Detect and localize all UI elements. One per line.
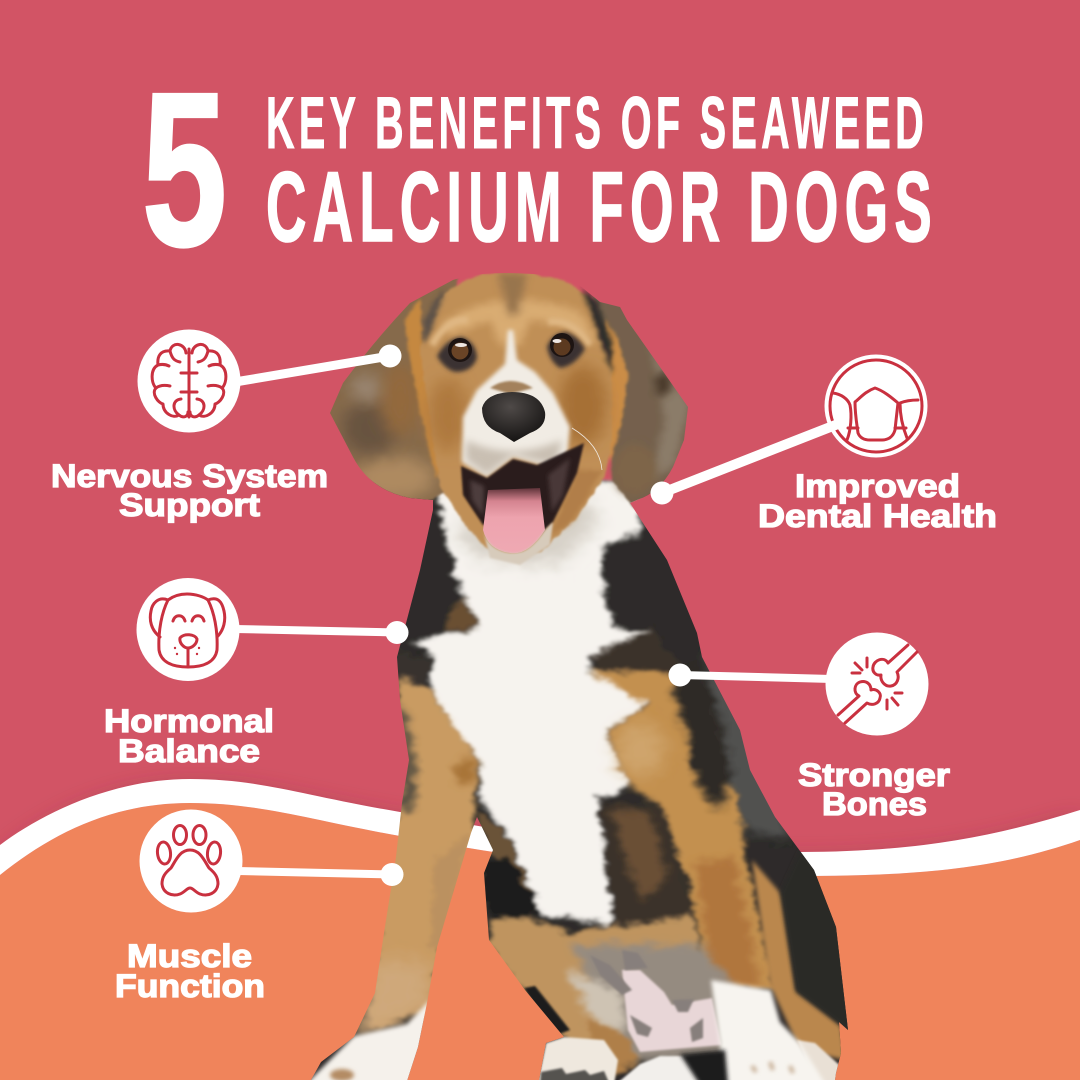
forehead dark stripe <box>498 272 527 315</box>
left leg lighter lower part <box>354 960 430 1040</box>
label: Function <box>115 968 265 1004</box>
dog photo illustration <box>311 273 848 1080</box>
right shoulder dark streak <box>672 665 730 810</box>
right brow <box>548 321 590 345</box>
icon: tooth <box>830 360 922 452</box>
connector line <box>235 356 390 382</box>
hind right tan <box>752 860 845 1060</box>
left iris <box>452 342 468 360</box>
connector dot <box>668 664 692 686</box>
connector line <box>235 629 397 632</box>
label <box>798 757 950 822</box>
left elbow brown <box>455 758 477 786</box>
label: Bones <box>822 786 927 822</box>
whisker <box>572 428 602 470</box>
left ear warm lower <box>355 456 435 500</box>
belly grey patches <box>590 950 703 1042</box>
tan near paw <box>585 1020 638 1075</box>
callout: stronger bones <box>668 632 950 822</box>
connector line <box>238 871 392 874</box>
head base <box>420 272 612 556</box>
left leg darker inner fold <box>430 835 470 950</box>
chest bib below chin <box>483 522 553 565</box>
forehead light tan <box>440 300 600 345</box>
right leg orange brown <box>695 860 760 985</box>
right eye socket <box>547 332 585 368</box>
tail black <box>680 1050 728 1080</box>
left cheek tan <box>428 379 468 451</box>
label: Dental Health <box>758 498 997 534</box>
belly light lower thigh <box>568 970 625 1035</box>
left ear base <box>310 270 460 510</box>
left inner chest streak <box>477 813 530 892</box>
icon circle <box>140 810 242 912</box>
hip black blob <box>484 860 540 920</box>
left shoulder and front leg <box>370 678 478 1030</box>
tail white tip <box>615 1056 705 1080</box>
muzzle grey shade <box>466 440 562 475</box>
left leg black streak <box>395 705 416 810</box>
grey outer back <box>703 650 790 840</box>
nose <box>482 392 545 442</box>
belly grey <box>571 945 735 1060</box>
right ear base <box>590 285 700 510</box>
title numeral 5: 5 <box>142 48 227 292</box>
right white leg and paw <box>711 980 826 1080</box>
white blaze <box>462 330 570 477</box>
right iris <box>554 338 570 356</box>
brown patch at left chest <box>445 600 480 632</box>
right shoulder light tan curl <box>616 724 664 776</box>
belly pink skin <box>622 970 722 1052</box>
left dark shoulder edge <box>397 656 428 684</box>
label: Stronger <box>798 757 950 793</box>
callout: muscle function <box>115 810 404 1004</box>
mouth gums left <box>470 480 484 516</box>
head group <box>310 270 700 556</box>
right eye highlight <box>552 339 562 343</box>
label: Muscle <box>127 938 252 974</box>
shoulder fold black with brown <box>592 628 678 672</box>
rear right paw <box>796 1039 838 1080</box>
paw toe tan dots <box>752 1062 793 1073</box>
hind left black sliver <box>524 986 570 1037</box>
muzzle tan spot <box>490 381 533 394</box>
wave shadow <box>62 777 1067 852</box>
tongue <box>483 488 545 553</box>
icon circle <box>138 330 240 432</box>
right cheek tan <box>559 365 607 445</box>
right ear dark spot <box>654 372 672 396</box>
orange lower panel <box>0 803 1080 1080</box>
left white paw <box>300 1000 430 1080</box>
icon circle <box>136 578 240 681</box>
connector dot <box>386 621 408 644</box>
icon circle <box>826 632 928 736</box>
connector line <box>680 675 832 679</box>
right ear warm lower <box>613 444 657 496</box>
connector dot <box>378 344 402 368</box>
right eye <box>550 333 574 357</box>
left ear orange inner edge <box>405 298 445 478</box>
right ear lighter edge <box>650 340 690 480</box>
jaw right tan <box>550 470 603 535</box>
grey neck shade <box>455 500 600 565</box>
label <box>51 458 328 523</box>
body group with fur edges <box>311 478 848 1080</box>
left ear dark centre <box>342 402 398 454</box>
white neck and chest <box>413 480 650 925</box>
connector line <box>662 424 838 493</box>
hind right black flank <box>777 850 848 1030</box>
dark edge right of head <box>582 288 612 375</box>
left eye highlight <box>455 343 467 347</box>
callout: improved dental health <box>650 354 997 534</box>
chest dark patch <box>598 802 697 925</box>
connector dot <box>380 863 404 886</box>
label: Hormonal <box>104 703 274 739</box>
label: Nervous System <box>51 458 328 494</box>
white wave band <box>0 779 1080 876</box>
left ear warm centre <box>380 364 420 436</box>
label <box>758 468 997 534</box>
icon: dog face <box>150 594 225 667</box>
title <box>142 48 938 292</box>
right shoulder tan <box>590 672 775 990</box>
body base black <box>311 478 848 1080</box>
mouth interior <box>461 443 584 535</box>
label: Balance <box>118 733 260 769</box>
callout: hormonal balance <box>104 578 408 769</box>
hind left thigh <box>488 917 700 1060</box>
callout: nervous system support <box>51 330 402 523</box>
connector dot <box>650 482 674 504</box>
label <box>115 938 265 1004</box>
left brow <box>432 320 468 345</box>
icon: brain <box>152 344 226 417</box>
front middle paw <box>537 1037 618 1080</box>
chest patch tan streaks <box>610 808 668 900</box>
icon: paw <box>156 826 222 895</box>
left paw tan smudge <box>330 1069 354 1080</box>
left eye socket <box>437 337 477 372</box>
label: Improved <box>795 468 960 504</box>
dark edge left of head <box>423 290 445 345</box>
paw toenails dark <box>540 1068 610 1080</box>
icon circle <box>824 354 928 458</box>
right ear orange inner edge <box>603 318 628 462</box>
left eye <box>448 338 472 362</box>
left ear grey spot <box>352 376 380 400</box>
icon: bones <box>838 645 917 723</box>
label: Support <box>119 487 260 523</box>
mouth gums right <box>548 458 570 512</box>
label <box>104 703 274 769</box>
